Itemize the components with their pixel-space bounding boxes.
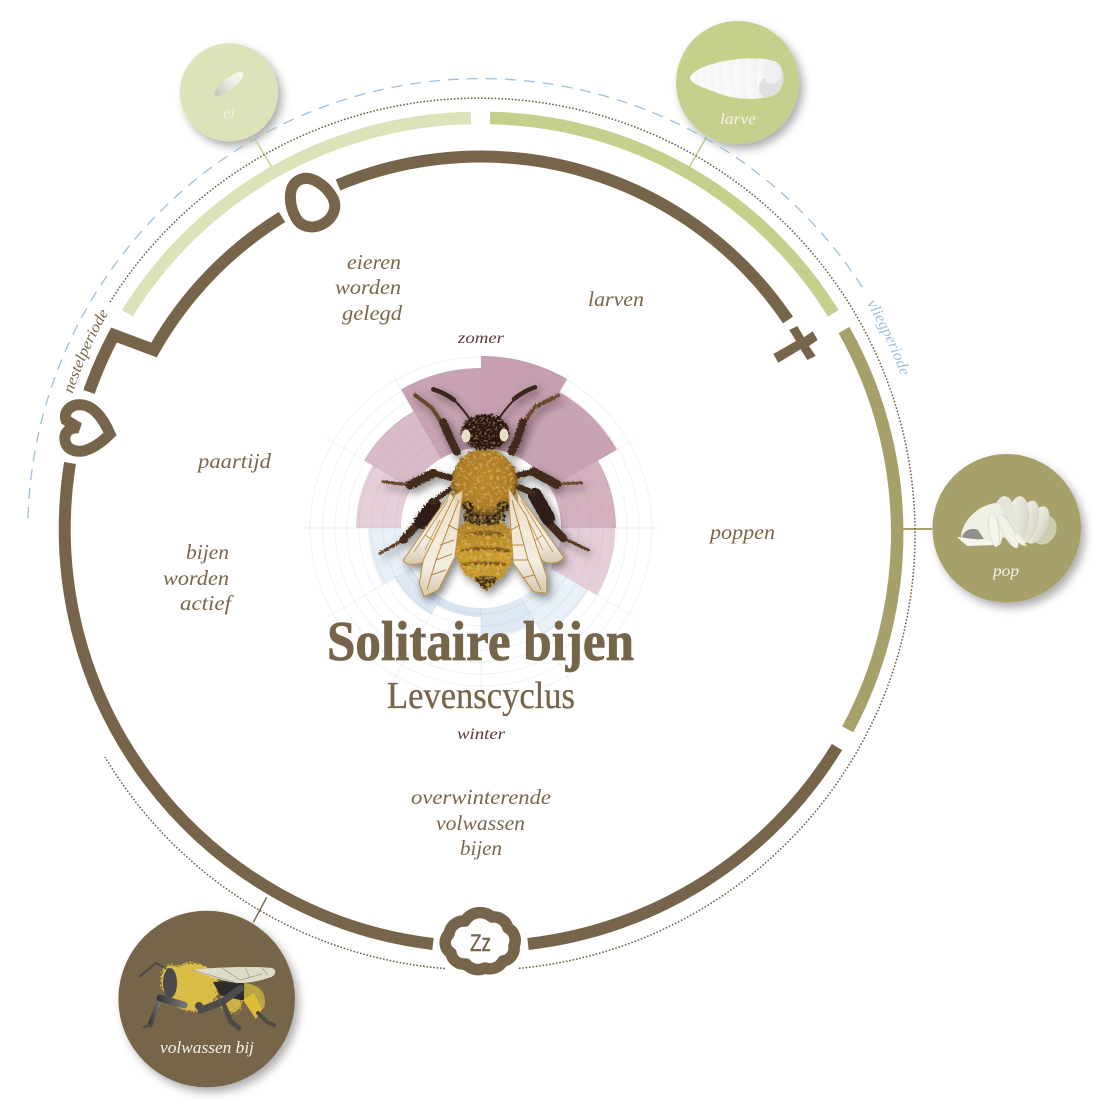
subtitle: Levenscyclus (387, 675, 575, 717)
abdomen (455, 519, 513, 591)
label: pop: pop (992, 563, 1019, 580)
stage arc: pop (844, 330, 897, 729)
fore wings (419, 487, 547, 597)
icon: adult bee (139, 963, 275, 1028)
stage arc: ei (127, 118, 471, 313)
label: poppen: poppen (708, 520, 775, 544)
label: paartijd: paartijd (196, 449, 272, 473)
head (461, 414, 509, 450)
icon: heart (65, 405, 110, 451)
bubble: larve (676, 21, 799, 144)
hind wings (403, 491, 563, 564)
title: Solitaire bijen (327, 611, 634, 673)
label: ei: ei (223, 105, 235, 122)
label: nestelperiode: nestelperiode (66, 310, 108, 394)
stage arc: larve (490, 118, 833, 313)
label: volwassen bij: volwassen bij (160, 1038, 254, 1057)
legs (380, 395, 588, 553)
label: eieren worden gelegd: worden (335, 275, 401, 299)
bubble: volwassen bij (118, 911, 295, 1087)
dotted arc: seasons (105, 98, 915, 968)
icon: sleeping cloud (445, 913, 515, 970)
label: bijen worden actief: worden (163, 566, 229, 590)
summer sectors (356, 356, 617, 595)
label: bijen worden actief: actief (180, 591, 234, 615)
icon: egg (211, 69, 247, 99)
connector lines (253, 136, 932, 922)
label: overwinterende volwassen bijen: bijen (460, 836, 502, 860)
icon: cross (773, 326, 818, 363)
label: bijen worden actief: bijen (186, 540, 229, 564)
label: eieren worden gelegd: eieren (347, 250, 401, 274)
bubble: ei (180, 43, 278, 141)
icon: pupa (957, 495, 1061, 550)
label: bijen worden actief (163, 540, 234, 615)
winter sectors (368, 528, 588, 637)
illustration: bee (380, 387, 588, 597)
rose chart: seasons (303, 350, 659, 706)
label: eieren worden gelegd (335, 250, 403, 325)
antennae (433, 387, 535, 422)
label: overwinterende volwassen bijen: overwinterende (411, 785, 551, 809)
life cycle ring (65, 157, 837, 944)
label: vliegperiode: vliegperiode (868, 300, 908, 375)
icon: larva (690, 58, 784, 99)
label: overwinterende volwassen bijen: volwassen (436, 811, 525, 835)
label: zomer: zomer (457, 330, 505, 347)
label: overwinterende volwassen bijen (411, 785, 551, 860)
label: larven: larven (588, 287, 644, 311)
label: winter: winter (457, 726, 506, 743)
bubble: pop (932, 454, 1081, 603)
label: Zz: Zz (470, 930, 491, 957)
dashed arc: vliegperiode (28, 79, 863, 518)
label: eieren worden gelegd: gelegd (342, 301, 403, 325)
label: larve: larve (720, 111, 756, 128)
thorax (451, 449, 517, 525)
icon: egg outline (280, 170, 342, 234)
